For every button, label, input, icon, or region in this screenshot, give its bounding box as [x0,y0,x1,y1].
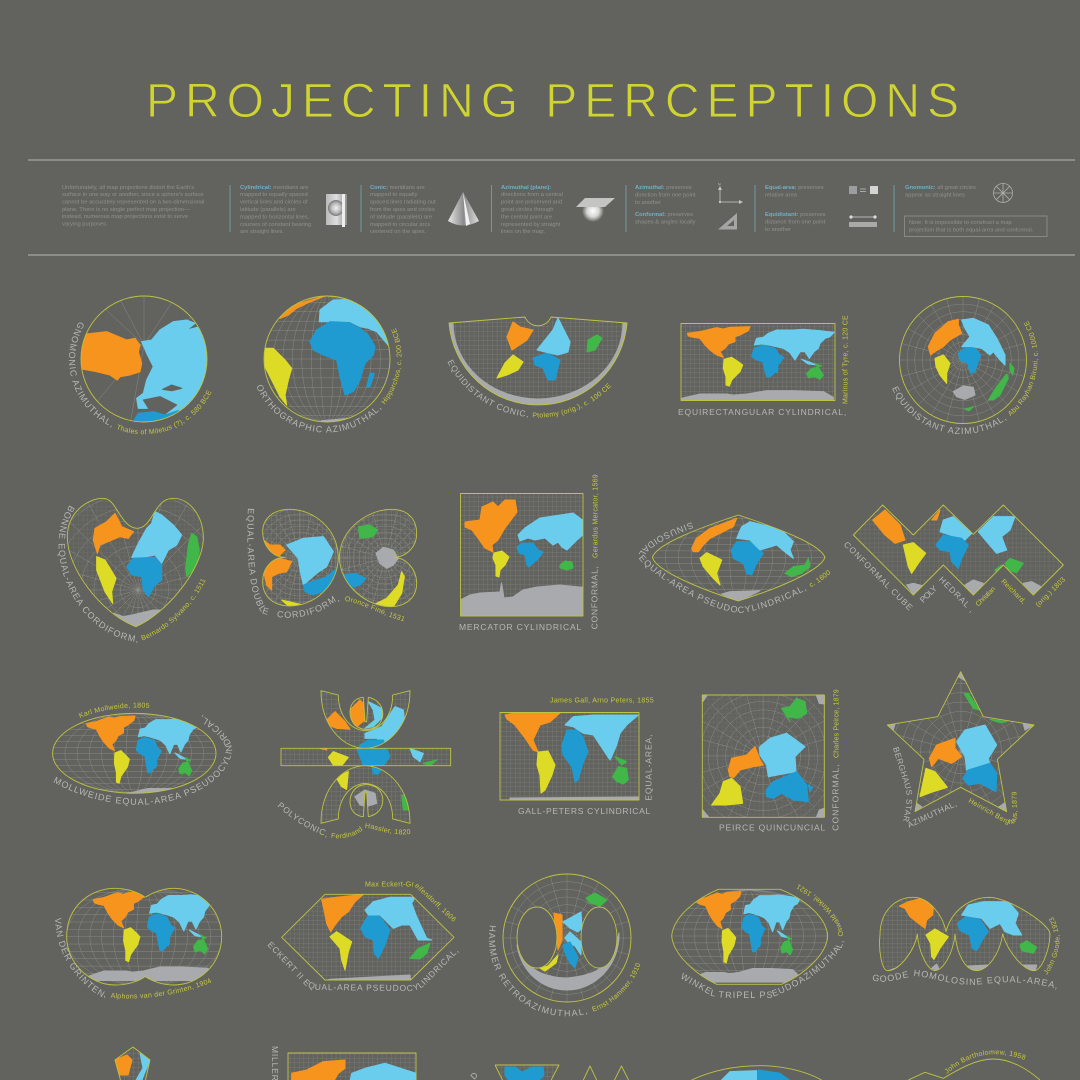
icon: cone [448,192,479,226]
outline [115,1047,150,1080]
legend: equal-area and equidistant: to another [765,227,791,233]
legend: azimuthal and conformal [626,182,743,232]
label: POLY [918,583,940,605]
legend: azimuthal plane: Azimuthal (plane): [501,185,551,191]
label: MERCATOR CYLINDRICAL [459,622,582,632]
legend: gnomonic and note [894,184,1047,236]
legend: conic: centered on the apex. [370,229,426,235]
legend: equal-area and equidistant: Equidistant: preserves [765,212,826,218]
outline [503,874,631,1002]
label: POLYCONIC, Ferdinand Hassler, 1820 [278,802,410,838]
legend: cylindrical: vertical lines and circles of [240,200,308,206]
label vertical: CONFORMAL, [589,565,599,629]
continents [682,327,834,402]
maker: Max Eckert-Greifendorff, 1906 [366,881,456,922]
intro text block: surface in one way or another, since a sphere's surface [62,192,204,198]
legend: cylindrical: Cylindrical: meridians are [240,185,308,191]
legend: conic: Conic: meridians are [370,185,425,191]
map: polyconic [278,690,452,838]
icon: cylinder [326,194,347,227]
legend: equal-area and equidistant: distance from one point [765,219,826,225]
title: PROJECTING PERCEPTIONS [146,75,959,128]
legend: cylindrical [230,185,347,235]
legend: cylindrical: mapped to equally spaced [240,192,308,198]
outline [288,1053,416,1080]
label: WINKEL TRIPEL PSEUDOAZIMUTHAL, Oswald Winkel, 1921 [682,884,844,998]
map: partial pentagon projection [114,1046,150,1080]
intro text block: instead, numerous map projections exist to serve [62,214,188,220]
outline [702,695,824,817]
outline [500,712,639,800]
label: EQUIDISTANT CONIC, Ptolemy (orig.), c. 100 CE [448,360,612,418]
legend: azimuthal plane: lines on the map. [501,229,546,235]
outline [672,889,828,984]
legend: conic: from the apex and circles [370,207,435,213]
map: peirce quincuncial [702,690,840,832]
legend: azimuthal plane [492,185,615,235]
legend: azimuthal plane: directions from a central [501,192,563,198]
legend: conic: mapped to circular arcs [370,222,430,228]
label: GALL-PETERS CYLINDRICAL [518,806,651,816]
map: partial ellipse projection [692,1066,822,1080]
legend: equal-area and equidistant: relative area [765,192,798,198]
map: equidistant azimuthal [892,296,1038,434]
continents [703,696,824,817]
map: mercator cylindrical [459,474,599,632]
intro text block: plane. There is no single perfect map projection— [62,207,190,213]
outline [281,691,451,823]
icon: north arrow: N [718,182,721,186]
legend: azimuthal and conformal: Azimuthal: preserves [635,185,692,191]
label [842,539,1067,615]
continents [460,500,585,616]
legend: conic: spaced lines radiating out [370,200,436,206]
map: gnomonic azimuthal [68,296,212,434]
map: equal-area double cordiform [246,508,418,622]
note box [904,216,1047,236]
label: PEIRCE QUINCUNCIAL [719,823,826,833]
legend: azimuthal plane: point are preserved and [501,200,562,206]
icon: plane and sphere [576,198,615,222]
label: ORTHOGRAPHIC AZIMUTHAL, Hipparchos, c. 200 BCE [257,328,402,433]
map: partial miller cylindrical [270,1046,416,1080]
intro text block: cannot be accurately represented on a two-dimensional [62,200,204,206]
label: VAN DER GRINTEN, Alphons van der Grinten, 1904 [55,918,212,1000]
label: BONNE EQUAL-AREA CORDIFORM, Bernardo Sylvano, c. 1511 [58,506,206,644]
map: conformal cube polyhedral [842,500,1067,615]
map: winkel tripel pseudoazimuthal [671,884,844,998]
outline [652,515,825,601]
continents [292,1060,416,1080]
outline [880,897,1050,971]
outline [67,498,203,627]
outline [853,505,1063,595]
map: bonne equal-area cordiform [58,498,206,644]
legend: cylindrical: mapped to horizontal lines, [240,214,310,220]
outline [900,296,1026,424]
legend: azimuthal plane: the central point are [501,214,552,220]
maker: Gerardus Mercator, 1569 [592,474,599,558]
legend: azimuthal and conformal: to another [635,200,661,206]
maker: Charles Peirce, 1879 [833,689,840,758]
map: mollweide equal-area pseudocylindrical [52,702,232,806]
legend: conic [361,185,479,235]
outline [282,894,454,980]
icon: ruler [849,215,877,227]
label: ECKERT II EQUAL-AREA PSEUDOCYLINDRICAL, [268,942,459,992]
continents [720,1070,792,1080]
continents [505,712,638,800]
outline [264,296,390,422]
legend: azimuthal plane: great circles through [501,207,554,213]
legend: conic: mapped to equally [370,192,417,198]
map: eckert ii equal-area pseudocylindrical [268,881,459,992]
label: EQUAL-AREA DOUBLE CORDIFORM, Oronce Finé, 1531 [246,508,404,622]
label vertical: CONFORMAL, [830,764,840,831]
maker: Heinrich Berghaus, 1879 [968,792,1018,825]
map: van der grinten [55,888,222,1000]
outline [263,509,417,607]
label: HEDRAL , [937,574,977,615]
outline [495,1065,631,1080]
legend: equal-area and equidistant: Equal-area: preserves [765,185,824,191]
legend: azimuthal and conformal: direction from one point [635,192,696,198]
legend: equal-area and equidistant [755,185,878,233]
map: gall-peters cylindrical [500,698,654,816]
outline [681,324,835,400]
label: EQUIRECTANGULAR CYLINDRICAL, [678,407,847,417]
note box: projection that is both equal-area and conformal. [909,227,1034,233]
map: berghaus star azimuthal [886,671,1034,828]
map: goode homolosine equal-area [872,896,1060,990]
legend: cylindrical: courses of constant bearing [240,222,311,228]
label second part: AZIMUTHAL, [908,803,957,828]
maker: Karl Mollweide, 1805 [78,702,150,718]
map: hammer retroazimuthal [488,874,640,1016]
outline [81,296,207,422]
outline [887,672,1034,812]
map: partial triangular projection [468,1065,631,1080]
legend: gnomonic and note: Gnomonic: all great circles [905,185,976,191]
icon: wheel [994,184,1012,202]
label: HAMMER RETROAZIMUTHAL, Ernst Hammer, 1910 [488,926,640,1016]
label: Christian [975,585,997,608]
legend: gnomonic and note: appear as straight lines [905,192,965,198]
outline [53,713,216,793]
map: equidistant conic [448,316,628,418]
icon: equal squares [849,186,878,194]
map: sinusoidal equal-area pseudocylindrical [638,514,830,613]
label: Reichard, [999,578,1027,606]
icon: set square [718,213,737,230]
maker: John Goode, 1923 [1044,917,1060,974]
map: partial bartholomew projection [908,1050,1040,1080]
label: (orig.) 1803 [1035,576,1067,609]
outline [67,888,222,985]
map: orthographic azimuthal [257,296,402,433]
outline [460,494,583,616]
label vertical: EQUAL-AREA, [644,734,654,801]
label: MOLLWEIDE EQUAL-AREA PSEUDOCYLINDRICAL, [54,714,232,806]
legend: azimuthal and conformal: Conformal: preserves [635,212,693,218]
legend: azimuthal and conformal: shapes & angles locally [635,219,696,225]
legend: conic: of latitude (parallels) are [370,214,432,220]
maker: John Bartholomew, 1958 [945,1050,1026,1074]
label: GNOMONIC AZIMUTHAL, Thales of Miletus (?), c. 580 BCE [68,322,212,434]
label: CONFORMAL CUBE [842,539,915,613]
note box: Note: It is impossible to construct a map [909,220,1012,226]
intro text block: Unfortunately, all map projections distort the Earth's [62,185,194,191]
label: GOODE HOMOLOSINE EQUAL-AREA, [872,970,1056,990]
label: SINUSOIDAL EQUAL-AREA PSEUDOCYLINDRICAL, c. 1600 [638,522,830,613]
legend: cylindrical: latitude (parallels) are [240,207,296,213]
legend: azimuthal plane: represented by straight [501,222,561,228]
label: BERGHAUS STAR [893,747,912,822]
legend: cylindrical: are straight lines. [240,229,285,235]
outline [692,1066,822,1080]
intro text block: varying purposes. [62,222,108,228]
maker: Marinus of Tyre, c. 120 CE [842,315,849,404]
maker: James Gall, Arno Peters, 1855 [550,698,654,705]
outline [449,317,627,405]
outline [908,1059,1040,1080]
map: equirectangular cylindrical [678,315,849,417]
label: EQUIDISTANT AZIMUTHAL, Abu Rayhan Biruni, c. 1000 CE [892,320,1038,434]
